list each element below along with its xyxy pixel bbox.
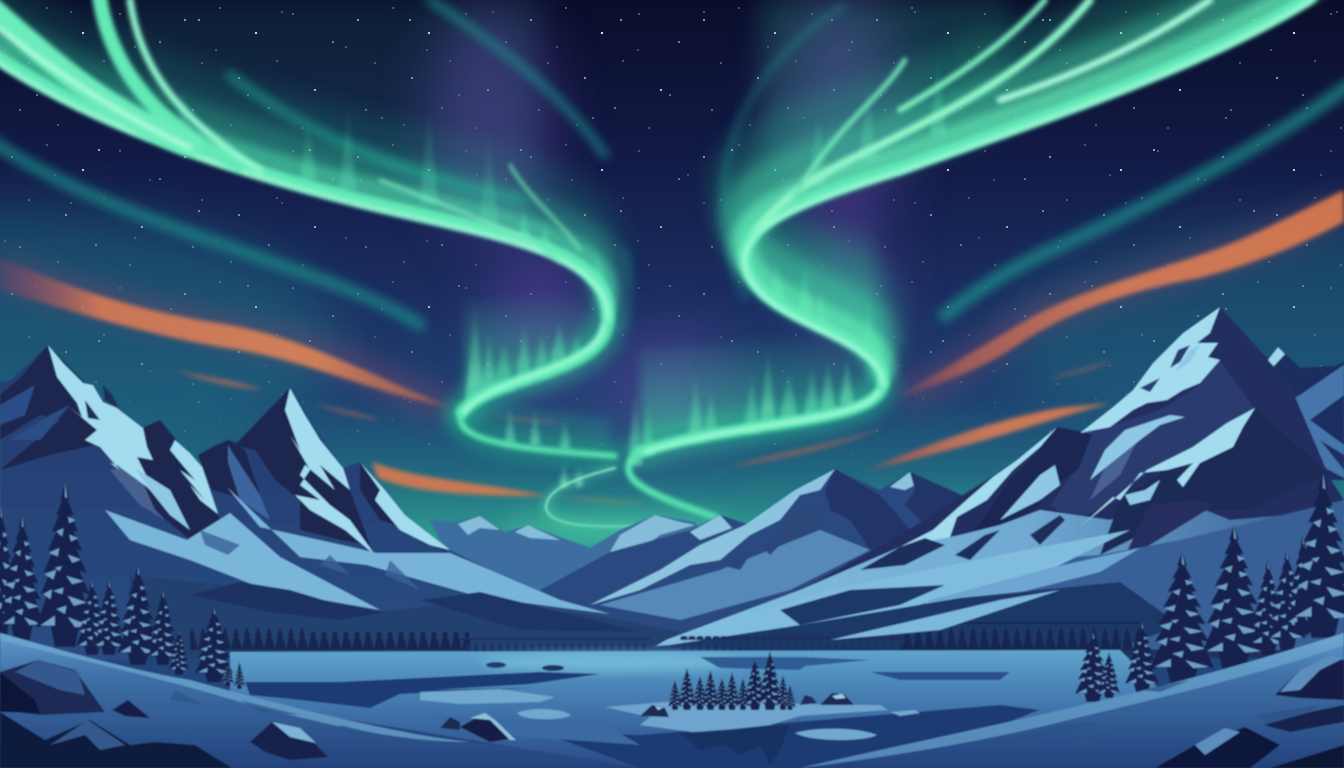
lit lower snow slope [650, 500, 1344, 646]
orange aurora streaks [0, 190, 1344, 503]
horizon glow [500, 508, 740, 552]
base ground fill [0, 560, 1344, 768]
right aurora band core [745, 0, 1312, 381]
left aurora inner strands [0, 0, 608, 412]
left aurora band glow [0, 0, 615, 456]
landscape [0, 307, 1344, 768]
left mountain one [0, 345, 380, 660]
frozen lake [230, 650, 1160, 768]
right aurora band glow [629, 0, 1312, 517]
right main mountain [650, 307, 1344, 660]
left shoulder peak snow [900, 427, 1057, 550]
purple aurora haze [430, 0, 900, 450]
lake rocks [421, 693, 854, 759]
centre right mountains [540, 469, 968, 635]
right foreground snowbank [800, 633, 1344, 768]
star field [0, 0, 1344, 480]
main peak dark rock faces [1050, 360, 1255, 520]
forested lower slopes [130, 575, 1180, 662]
left slope snowfields [105, 487, 610, 614]
left foreground trees [0, 482, 245, 689]
island tree cluster [668, 651, 796, 710]
left foreground snowbank [0, 633, 642, 768]
front peak dark face [1100, 408, 1330, 555]
right slope lower snowfield [650, 500, 1344, 650]
foreground rocks [0, 660, 105, 715]
small lower aurora loop [546, 468, 635, 526]
faint teal aurora ribbons [0, 0, 1344, 330]
main peak snow [1080, 307, 1220, 433]
left mountain two [198, 388, 610, 650]
aurora curtains: haze and vertical rays [100, 0, 1010, 487]
reflection of trees [680, 725, 790, 765]
snow shards [48, 345, 157, 497]
right foreground trees [1075, 473, 1344, 702]
right back ridge [1210, 340, 1344, 480]
left aurora band core [0, 45, 608, 315]
dark water patches [245, 672, 600, 708]
ice floes [420, 689, 555, 704]
right aurora inner strands [645, 0, 1312, 452]
distant centre mountains [430, 515, 720, 625]
small rocks on ice [486, 662, 506, 668]
foreground rocks [1275, 655, 1344, 700]
